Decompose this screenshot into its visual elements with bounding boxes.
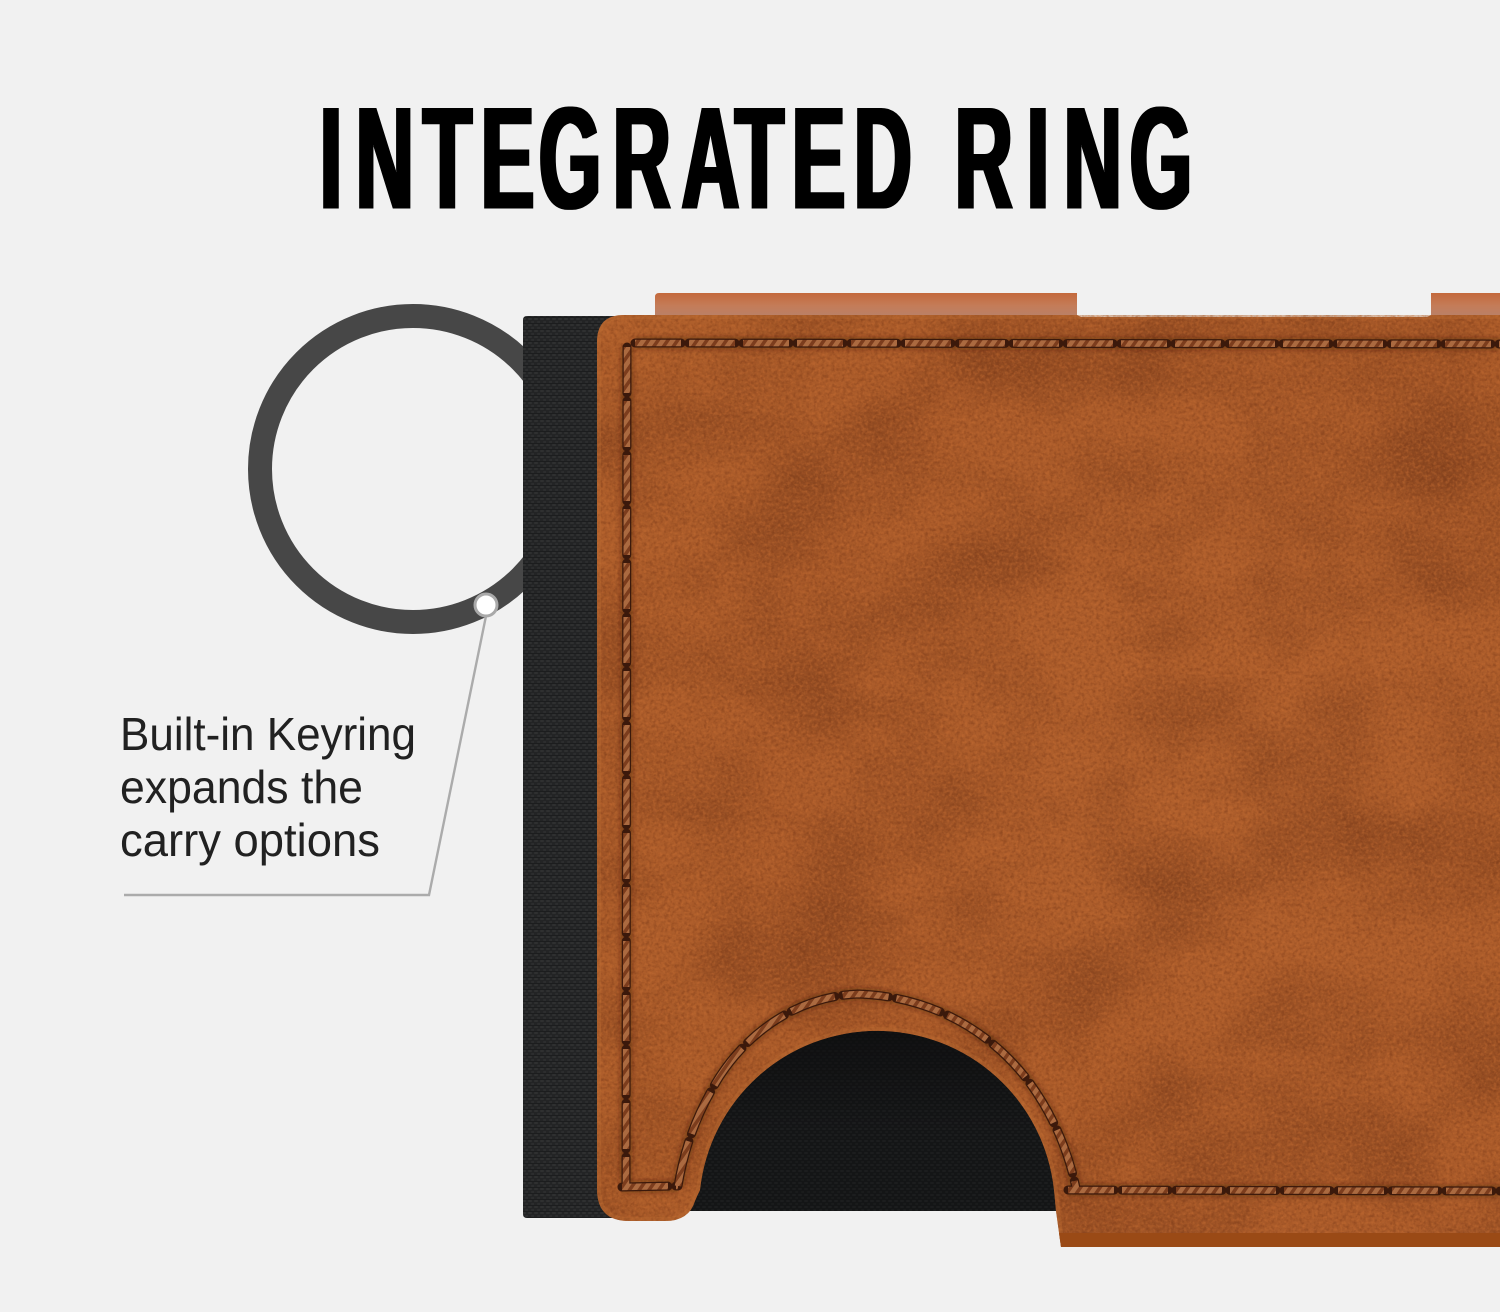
- panel: black fabric back: [523, 316, 1065, 1218]
- leather bottom edge: [1059, 1233, 1500, 1247]
- panel: top leather tabs: [655, 293, 1500, 316]
- callout text: expands the: [120, 761, 363, 813]
- stitching: [622, 343, 1500, 1191]
- panel: leather front: [590, 310, 1500, 1290]
- icon: keyring: [260, 316, 566, 622]
- callout text: [120, 708, 416, 866]
- callout leader line: [124, 616, 486, 895]
- wallet: [523, 293, 1500, 1290]
- title: INTEGRATED RING: [320, 76, 1192, 239]
- callout text: Built-in Keyring: [120, 708, 416, 760]
- callout marker dot: [475, 594, 497, 616]
- callout text: carry options: [120, 814, 380, 866]
